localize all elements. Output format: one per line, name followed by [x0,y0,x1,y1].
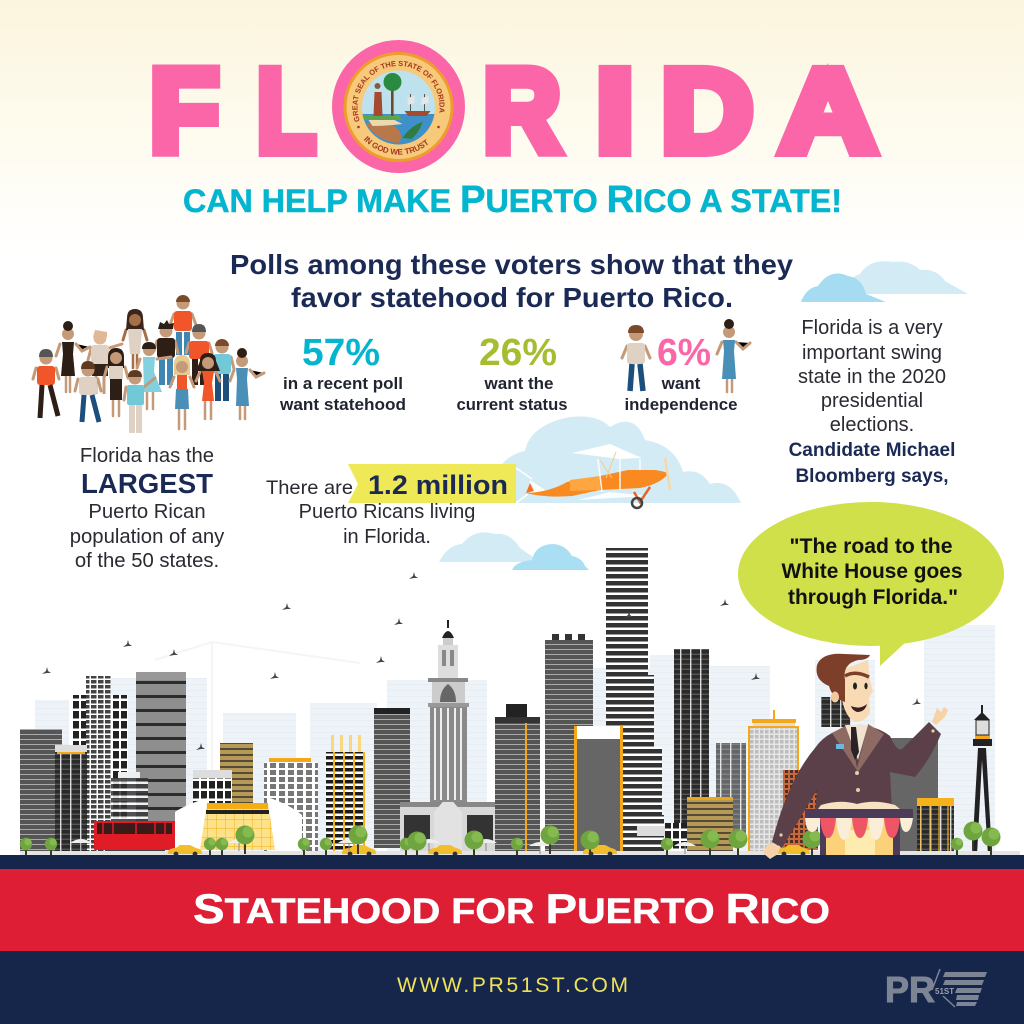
text: 1.2 million callout: Puerto Ricans living [299,501,475,523]
buttons [779,729,935,837]
heading: polls among voters [230,249,794,313]
stat: 6 percent with two figures: independence [624,395,738,414]
yellow glass building [175,798,302,855]
person 2 [56,321,90,392]
banner: Statehood for Puerto Rico [0,869,1024,951]
crane [155,642,360,780]
person 9 [230,348,264,419]
eye [853,682,857,690]
title: FLORIDA: R [483,45,561,177]
title: FLORIDA: A [780,44,877,177]
banner: Statehood for Puerto Rico: STATEHOOD FOR PUERTO RICO [193,885,830,932]
speech bubble with quote [738,502,1004,666]
city skyline [20,548,1020,860]
right text: swing state: Candidate Michael [789,440,955,461]
title: FLORIDA [150,44,877,177]
logo: PR 51st: 51ST [935,987,954,996]
website: WWW.PR51ST.COM [397,974,628,997]
right text: swing state: presidential [821,390,923,412]
stat: 57 percent: 57% [302,332,380,374]
stat: 6 percent with two figures: want [661,374,701,393]
right buildings [783,697,954,855]
heading: polls among voters: favor statehood for Puerto Rico. [291,282,733,313]
stat: 57 percent: want statehood [279,395,406,414]
person 7 [186,324,212,385]
person 6 [154,320,178,385]
logo: PR 51st: PR [885,969,935,1010]
person 13 [124,370,155,433]
cloud behind plane [483,416,741,503]
speech bubble with quote: through Florida." [788,585,958,609]
heading: polls among voters: Polls among these voters show that they [230,249,794,280]
title: FLORIDA: D [661,46,753,177]
person 11 [104,348,128,416]
right text: swing state: Bloomberg says, [795,466,949,487]
text: Florida has the largest: Puerto Rican [88,501,206,523]
icon: great seal of Florida: GREAT SEAL OF THE STATE OF FLORIDA [352,60,444,122]
stat: 6 percent with two figures: 6% [657,332,711,374]
observation tower [972,705,992,855]
person 3 [88,330,122,394]
right text: swing state: Florida is a very [801,317,943,339]
stat: 26 percent: 26% [479,332,557,374]
collar [832,724,884,772]
person 5 [170,295,196,355]
title: FLORIDA: I [596,46,634,177]
person 10 [75,361,101,422]
text: 1.2 million callout: 1.2 million [368,470,508,500]
ear [831,692,839,702]
mouth [851,704,867,712]
text: 1.2 million callout: There are [266,477,353,499]
bird flock [42,572,921,750]
red trolley bus [94,821,175,855]
person 14 [170,355,194,429]
right text: swing state [789,317,955,487]
illustration: candidate at podium [763,654,948,859]
figure: woman [717,319,750,392]
page background [0,0,1024,250]
text: 1.2 million callout [266,464,516,548]
footer band [0,951,1024,1024]
neck and face [842,660,873,722]
pin [836,744,844,749]
clouds lower [439,532,589,570]
clouds top right [801,261,968,302]
person 8 [210,339,234,401]
right text: swing state: state in the 2020 [798,366,946,388]
right text: swing state: elections. [830,414,914,436]
speech bubble with quote: "The road to the [790,534,953,558]
stat: 26 percent: current status [456,395,568,414]
figure: man [622,325,650,391]
person 4 [123,309,147,368]
hand on podium [763,843,780,859]
stat: 57 percent: in a recent poll [283,374,403,393]
text: Florida has the largest [70,445,225,572]
text: Florida has the largest: population of any [70,526,225,548]
illustration: crowd of people [33,295,264,433]
icon: great seal of Florida [332,40,465,173]
person 15 [196,353,220,419]
stat: 57 percent [279,332,406,414]
pale background buildings [35,625,995,855]
person 1 [33,349,59,418]
subtitle: CAN HELP MAKE PUERTO RICO A STATE! [183,179,842,221]
right text: swing state: important swing [802,342,942,364]
stat: 26 percent [456,332,568,414]
logo: PR 51st [885,969,987,1010]
text: 1.2 million callout: in Florida. [343,526,431,548]
hair [816,654,870,702]
airplane [516,444,670,508]
shirt and tie [845,725,868,760]
stat: 6 percent with two figures [622,319,750,414]
title: FLORIDA: L [257,44,316,177]
person 12 [137,342,171,409]
icon: great seal of Florida: IN GOD WE TRUST [364,136,428,155]
street: trees, taxis, umbrellas [20,822,1020,860]
speech bubble with quote: White House goes [782,559,963,583]
suit and arms [772,722,941,848]
road band [0,855,1024,869]
podium [805,802,913,855]
centre towers [495,548,798,855]
Freedom Tower [400,620,497,855]
eyebrow [845,673,869,677]
text: Florida has the largest: LARGEST [81,468,213,499]
text: Florida has the largest: of the 50 states. [75,550,219,572]
text: Florida has the largest: Florida has the [80,445,214,467]
hand raised [932,707,948,725]
stat: 26 percent: want the [484,374,553,393]
title: FLORIDA: F [150,44,219,177]
left towers [20,672,410,855]
